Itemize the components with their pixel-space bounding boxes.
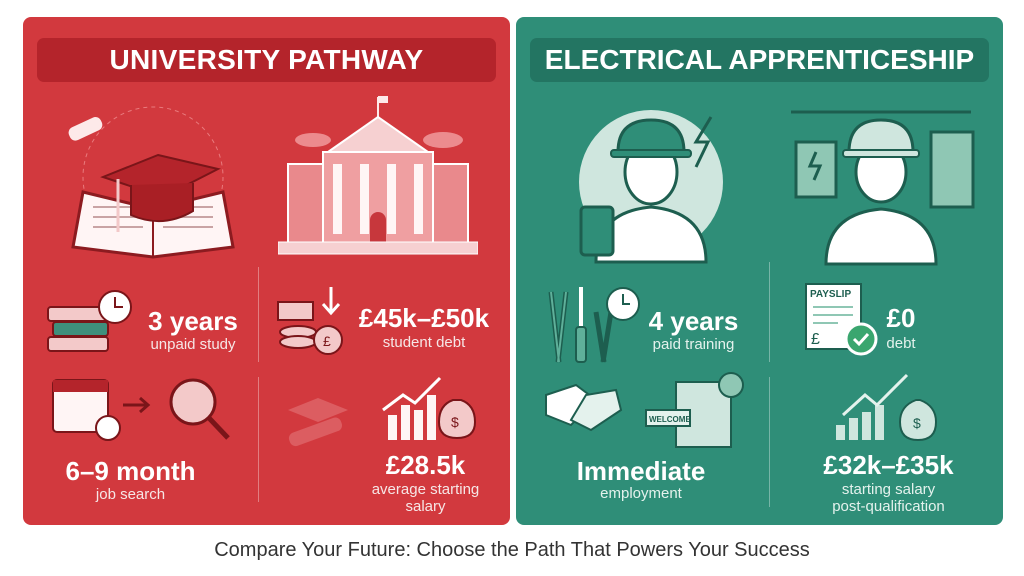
stat: job search: 6–9 month	[65, 456, 196, 486]
stat: starting salary post-qualification: £32k–£35k	[823, 450, 954, 480]
stat: 4 years paid training: 4 years	[649, 306, 738, 336]
stat: immediate employment: Immediate	[577, 456, 705, 486]
stat: average starting salary: salary	[405, 498, 446, 515]
stat: 3 years unpaid study: 3 years	[148, 306, 238, 336]
stat: 4 years paid training: paid training	[653, 336, 734, 353]
stat: average starting salary	[288, 377, 479, 515]
icon: electrician with multimeter	[579, 110, 723, 264]
stat: average starting salary: $	[451, 414, 459, 430]
stat: immediate employment	[545, 372, 744, 502]
panel: university pathway	[23, 17, 510, 525]
stat: starting salary post-qualification	[823, 374, 954, 515]
stat: 3 years unpaid study	[47, 290, 238, 353]
stat: immediate employment: WELCOME	[649, 415, 691, 424]
stat: zero debt: £	[811, 331, 820, 348]
stat: average starting salary: average starting	[372, 481, 479, 498]
panel: electrical apprenticeship	[516, 17, 1003, 525]
stat: student debt: £45k–£50k	[359, 303, 489, 333]
stat: starting salary post-qualification: starting salary	[842, 481, 935, 498]
stat: zero debt: £0	[887, 303, 915, 333]
heading: electrical apprenticeship	[530, 38, 989, 82]
icon: electrician at panel	[791, 110, 974, 266]
stat: zero debt: debt	[886, 335, 916, 352]
stat: job search: job search	[96, 486, 165, 503]
heading: university pathway	[37, 38, 496, 82]
stat: student debt: £	[323, 333, 331, 349]
stat: average starting salary: £28.5k	[386, 450, 465, 480]
icon: university building	[278, 96, 478, 254]
stat: 4 years paid training	[548, 287, 738, 363]
stat: job search	[52, 378, 230, 503]
heading: electrical apprenticeship: ELECTRICAL APPRENTICESHIP	[545, 44, 974, 75]
caption: Compare Your Future: Choose the Path That Powers Your Success	[214, 539, 810, 561]
stat: student debt	[277, 287, 490, 355]
stat: starting salary post-qualification: post-qualification	[832, 498, 945, 515]
stat: zero debt	[805, 283, 916, 356]
stat: zero debt: PAYSLIP	[810, 289, 851, 300]
icon: graduation cap and book	[68, 106, 235, 258]
stat: 3 years unpaid study: unpaid study	[150, 336, 236, 353]
heading: university pathway: UNIVERSITY PATHWAY	[110, 44, 423, 75]
stat: student debt: student debt	[383, 334, 465, 351]
stat: starting salary post-qualification: $	[913, 415, 921, 431]
stat: immediate employment: employment	[600, 485, 682, 502]
